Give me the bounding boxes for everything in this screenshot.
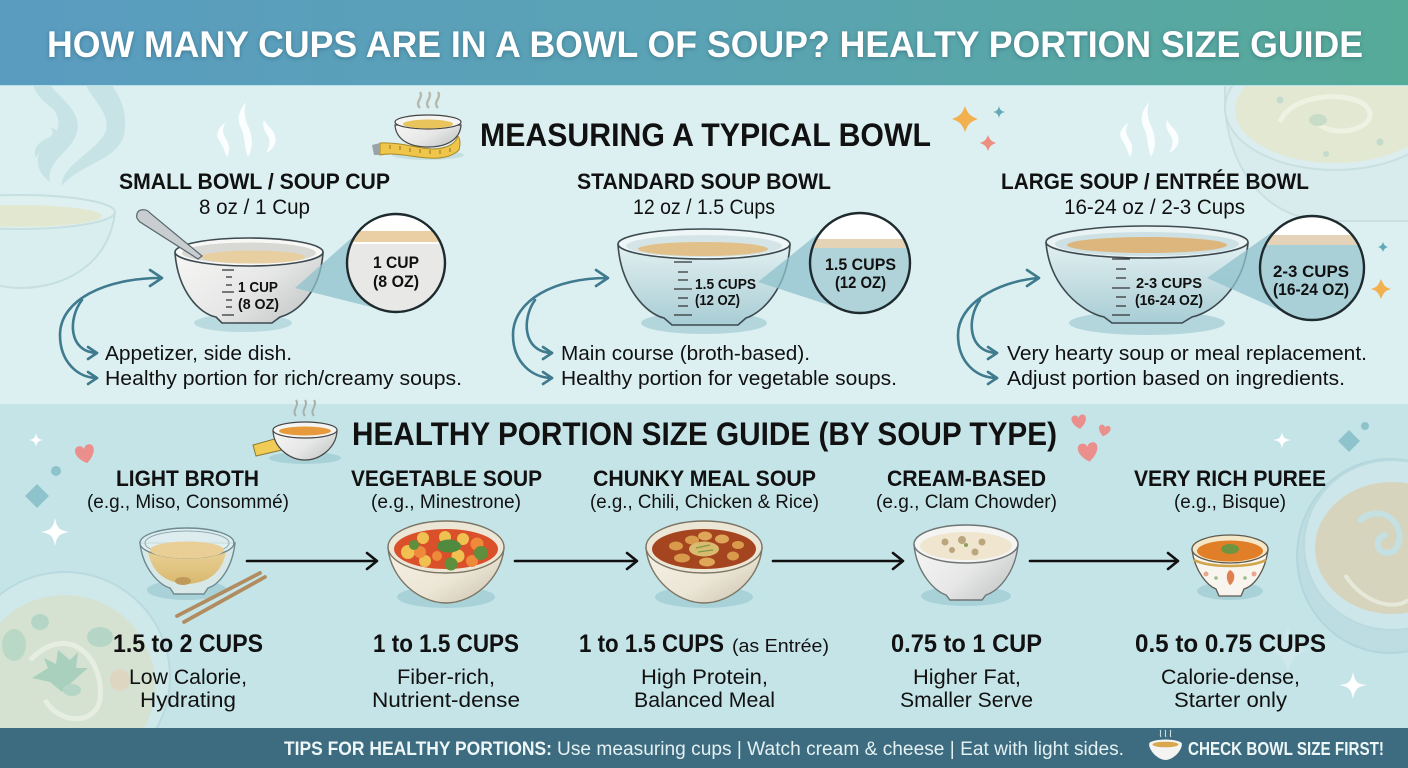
heading: large bowl: LARGE SOUP / ENTRÉE BOWL — [1001, 169, 1309, 194]
footer bar — [0, 728, 1408, 768]
heading: healthy portion size guide: HEALTHY PORTION SIZE GUIDE (BY SOUP TYPE) — [352, 416, 1057, 452]
benefit: light broth — [129, 666, 247, 712]
amount: chunky meal soup — [579, 630, 829, 658]
arrow: cream to puree — [1030, 553, 1178, 569]
benefit: cream-based — [900, 666, 1033, 712]
column: vegetable soup — [351, 466, 542, 712]
notes: standard bowl: Healthy portion for vegetable soups. — [561, 368, 897, 390]
icon: footer bowl — [1149, 730, 1182, 760]
icon: small bowl with tape — [253, 400, 341, 464]
sparkles: top right cluster — [952, 106, 1391, 299]
illustration: large bowl — [1046, 226, 1248, 335]
label: cream-based: CREAM-BASED — [887, 466, 1046, 491]
panel: measuring background — [0, 85, 1408, 404]
sparkles and hearts: lower left — [25, 433, 96, 546]
arrows: small bowl notes — [60, 270, 162, 384]
arrow: broth to vegetable — [247, 553, 377, 569]
benefit: chunky meal soup — [634, 666, 775, 712]
benefit: very rich puree — [1161, 666, 1300, 712]
examples: light broth: (e.g., Miso, Consommé) — [87, 492, 289, 513]
column: cream-based — [876, 466, 1057, 712]
arrow: vegetable to chunky — [515, 553, 637, 569]
examples: very rich puree: (e.g., Bisque) — [1174, 492, 1286, 513]
arrows: standard bowl notes — [513, 270, 608, 384]
notes: standard bowl — [561, 343, 897, 390]
heading: standard bowl: STANDARD SOUP BOWL — [577, 169, 831, 194]
benefit: cream-based: Higher Fat, — [913, 666, 1021, 689]
amount: light broth: 1.5 to 2 CUPS — [113, 630, 263, 658]
arrow: chunky to cream — [773, 553, 903, 569]
tips text: TIPS FOR HEALTHY PORTIONS: — [284, 739, 552, 760]
illustration: bisque bowl — [1192, 535, 1268, 600]
callout: standard bowl zoom: 1.5 CUPS — [825, 255, 896, 274]
heading: measuring a typical bowl: MEASURING A TYPICAL BOWL — [480, 117, 931, 153]
header banner — [0, 0, 1408, 85]
examples: vegetable soup: (e.g., Minestrone) — [371, 492, 521, 513]
illustration: standard bowl: (12 OZ) — [695, 292, 740, 309]
benefit: vegetable soup — [372, 666, 520, 712]
icon: white steam left — [217, 102, 276, 157]
notes: small bowl: Appetizer, side dish. — [105, 343, 292, 365]
illustration: small bowl — [137, 210, 323, 332]
sparkles: lower right — [1266, 422, 1369, 699]
icon: bowl with measuring tape — [372, 92, 464, 160]
illustration: cream soup bowl — [914, 525, 1018, 606]
examples: cream-based: (e.g., Clam Chowder) — [876, 492, 1057, 513]
hearts: by heading — [1071, 414, 1111, 463]
amount: cream-based: 0.75 to 1 CUP — [891, 630, 1042, 658]
label: light broth: LIGHT BROTH — [116, 466, 259, 491]
amount: chunky meal soup: (as Entrée) — [732, 636, 829, 656]
notes: large bowl: Very hearty soup or meal replacement. — [1007, 343, 1367, 365]
heading: small bowl: SMALL BOWL / SOUP CUP — [119, 169, 390, 194]
notes: large bowl — [1007, 343, 1367, 390]
benefit: very rich puree: Starter only — [1174, 689, 1288, 712]
benefit: vegetable soup: Fiber-rich, — [397, 666, 495, 689]
benefit: vegetable soup: Nutrient-dense — [372, 689, 520, 712]
tips text — [284, 739, 1124, 760]
benefit: light broth: Low Calorie, — [129, 666, 247, 689]
column: light broth — [87, 466, 289, 712]
notes: large bowl: Adjust portion based on ingredients. — [1007, 368, 1345, 390]
icon: chopsticks — [177, 573, 265, 622]
notes: standard bowl: Main course (broth-based). — [561, 343, 810, 365]
icon: white steam right — [1120, 102, 1179, 157]
callout: small bowl zoom: 1 CUP — [373, 253, 419, 272]
callout: large bowl zoom — [1207, 216, 1364, 320]
benefit: chunky meal soup: Balanced Meal — [634, 689, 775, 712]
illustration: standard bowl: 1.5 CUPS — [695, 276, 756, 293]
illustration: large bowl: 2-3 CUPS — [1136, 275, 1202, 292]
background decor: top right ghost bowl — [1224, 86, 1408, 222]
benefit: chunky meal soup: High Protein, — [641, 666, 768, 689]
amount: vegetable soup: 1 to 1.5 CUPS — [373, 630, 519, 658]
benefit: very rich puree: Calorie-dense, — [1161, 666, 1300, 689]
notes: small bowl: Healthy portion for rich/creamy soups. — [105, 368, 462, 390]
illustration: glass broth bowl — [140, 528, 235, 600]
benefit: light broth: Hydrating — [140, 689, 236, 712]
illustration: small bowl: 1 CUP — [238, 279, 278, 296]
illustration: small bowl: (8 OZ) — [238, 296, 279, 313]
amount: chunky meal soup: 1 to 1.5 CUPS — [579, 630, 724, 658]
notes: small bowl — [105, 343, 462, 390]
column: chunky meal soup — [579, 466, 829, 712]
callout: standard bowl zoom — [758, 213, 910, 313]
panel: portion guide background — [0, 404, 1408, 728]
tips text: Use measuring cups | Watch cream & cheese | Eat with light sides. — [557, 739, 1124, 760]
title: HOW MANY CUPS ARE IN A BOWL OF SOUP? HEALTY PORTION SIZE GUIDE — [47, 24, 1363, 65]
callout: standard bowl zoom: (12 OZ) — [835, 273, 886, 292]
benefit: cream-based: Smaller Serve — [900, 689, 1033, 712]
illustration: large bowl: (16-24 OZ) — [1135, 292, 1203, 309]
capacity: small bowl: 8 oz / 1 Cup — [199, 196, 310, 219]
amount: very rich puree: 0.5 to 0.75 CUPS — [1135, 630, 1326, 658]
capacity: large bowl: 16-24 oz / 2-3 Cups — [1064, 196, 1245, 219]
label: chunky meal soup: CHUNKY MEAL SOUP — [593, 466, 816, 491]
callout: large bowl zoom: 2-3 CUPS — [1273, 262, 1349, 281]
panel: standard bowl — [513, 169, 910, 390]
background decor: bottom right soup bowl — [1297, 459, 1408, 653]
illustration: vegetable soup bowl — [388, 521, 504, 608]
examples: chunky meal soup: (e.g., Chili, Chicken & Rice) — [590, 492, 819, 513]
panel: small bowl — [60, 169, 462, 390]
column: very rich puree — [1134, 466, 1326, 712]
illustration: standard bowl — [618, 229, 790, 334]
capacity: standard bowl: 12 oz / 1.5 Cups — [633, 196, 775, 219]
arrows: large bowl notes — [958, 270, 1039, 384]
background decor: bottom left soup plate — [0, 571, 171, 728]
callout: small bowl zoom: (8 OZ) — [373, 272, 419, 291]
panel: large bowl — [958, 169, 1367, 390]
label: vegetable soup: VEGETABLE SOUP — [351, 466, 542, 491]
callout: large bowl zoom: (16-24 OZ) — [1273, 280, 1349, 299]
callout: small bowl zoom — [295, 214, 445, 312]
illustration: chunky soup bowl — [646, 521, 762, 608]
label: very rich puree: VERY RICH PUREE — [1134, 466, 1326, 491]
background decor: left steam and ghost bowl — [0, 85, 125, 288]
